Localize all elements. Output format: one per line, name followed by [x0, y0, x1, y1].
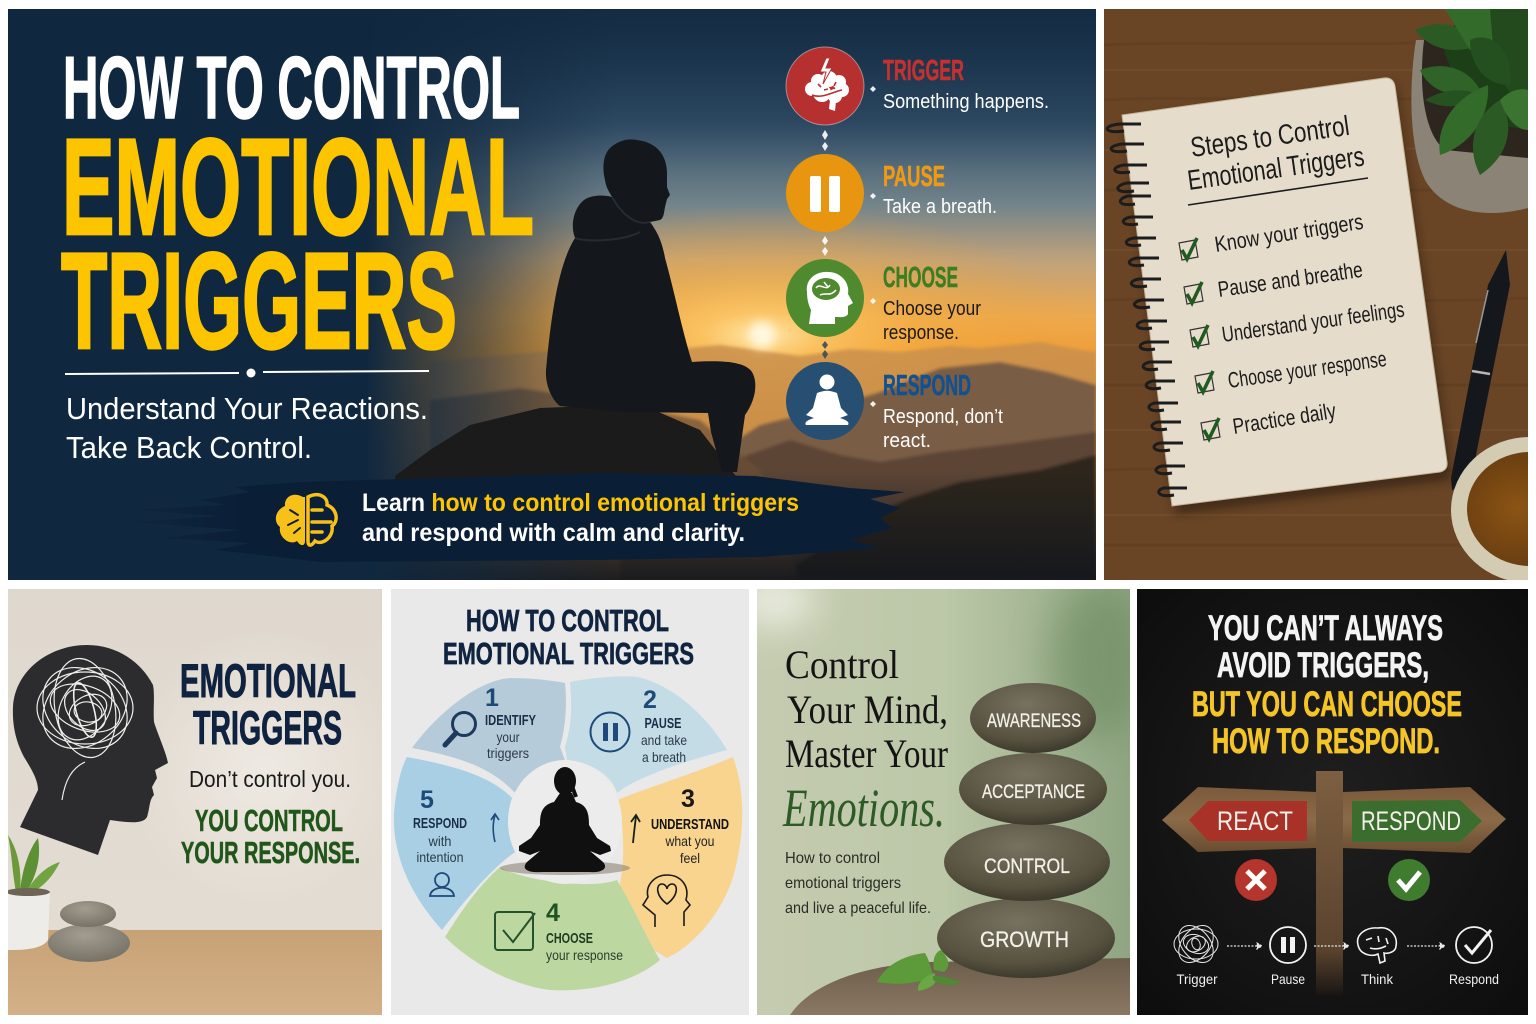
- center circle: [508, 760, 622, 884]
- rock under the figure: [395, 406, 736, 480]
- segment 5: respond: [394, 757, 515, 930]
- text: serif heading: [785, 642, 948, 776]
- text: diagram title: EMOTIONAL TRIGGERS: [443, 636, 694, 671]
- segment 1: identify: [412, 678, 566, 793]
- text: heading: EMOTIONAL: [180, 654, 356, 707]
- stone: acceptance: ACCEPTANCE: [982, 782, 1085, 803]
- wall: [8, 589, 382, 930]
- icon: trigger scribble: [1172, 919, 1220, 969]
- text: serif heading: Your Mind,: [787, 687, 948, 732]
- meditating silhouette: [500, 767, 630, 875]
- panel: react vs respond signpost: [1137, 589, 1528, 1015]
- segment 4: choose: your response: [546, 947, 623, 963]
- arrow: [1227, 943, 1262, 949]
- segment 3: understand: 3: [681, 785, 695, 813]
- checklist: [1179, 209, 1406, 440]
- notebook page: [1122, 78, 1447, 506]
- checklist: Understand your feelings: [1220, 297, 1406, 347]
- segment 1: identify: triggers: [487, 745, 529, 761]
- segment 4: choose: [445, 867, 660, 990]
- post: [1316, 771, 1343, 995]
- sign: react: [1162, 787, 1316, 852]
- process labels: Trigger: [1176, 971, 1218, 987]
- process labels: Pause: [1271, 971, 1305, 987]
- text: main title: EMOTIONAL: [62, 111, 534, 264]
- spiral binding: [1107, 124, 1187, 496]
- text: headline: AVOID TRIGGERS,: [1217, 646, 1429, 685]
- segment 2: pause: a breath: [642, 749, 686, 765]
- text: script word: Emotions.: [782, 778, 945, 838]
- panel: emotional triggers head: [6, 589, 405, 1015]
- handwritten title: [1188, 114, 1364, 190]
- pebbles: [48, 901, 130, 962]
- text: heading: TRIGGERS: [193, 701, 342, 754]
- icon: green check: [1388, 859, 1430, 901]
- process labels: Think: [1361, 971, 1394, 987]
- silhouette: seated man: [546, 139, 755, 472]
- segment 5: respond: with: [428, 833, 452, 849]
- text: don't control you: Don’t control you.: [189, 766, 351, 792]
- stone: acceptance: [959, 753, 1107, 825]
- checklist: Know your triggers: [1213, 209, 1365, 257]
- step: trigger: [786, 47, 1049, 125]
- plant leaves: [1415, 9, 1528, 175]
- plant pot: [1411, 9, 1528, 213]
- text: banner message: and respond with calm and clarity.: [362, 519, 745, 547]
- head silhouette: [13, 645, 168, 855]
- checklist: Choose your response: [1226, 346, 1388, 393]
- step: choose: [786, 259, 981, 344]
- checkboxes: [1179, 238, 1220, 440]
- segment 3: understand: what you: [665, 833, 714, 849]
- step: choose: CHOOSE: [883, 262, 958, 294]
- panel: hero banner: [8, 9, 1096, 580]
- stone: control: CONTROL: [984, 855, 1070, 878]
- step: trigger: Something happens.: [883, 91, 1049, 113]
- sun glow: [556, 216, 994, 358]
- arrow: [1407, 943, 1445, 949]
- segment 5: respond: 5: [420, 786, 434, 814]
- text: banner message: [362, 489, 799, 547]
- mountains: [430, 342, 1096, 580]
- text: tagline: How to control: [785, 850, 880, 867]
- text: subtitle: Take Back Control.: [66, 430, 312, 465]
- segment 2: pause: 2: [643, 686, 657, 714]
- process row: [1172, 919, 1499, 987]
- flow: four steps: [786, 47, 1049, 452]
- divider: [65, 368, 429, 378]
- text: serif heading: Master Your: [785, 731, 948, 776]
- icon: yellow brain: [276, 495, 336, 545]
- icon: red cross: [1235, 859, 1277, 901]
- segment 2: pause: [565, 676, 727, 793]
- sign: respond: [1343, 787, 1506, 853]
- text: tagline: emotional triggers: [785, 875, 901, 892]
- step: pause: [786, 154, 997, 232]
- segment 2: pause: and take: [641, 732, 687, 748]
- text: main title: [61, 56, 532, 351]
- scribble thoughts: [36, 658, 134, 800]
- blurred green background: [757, 589, 1130, 1015]
- arrow: [1314, 943, 1349, 949]
- segment 3: understand: UNDERSTAND: [651, 816, 729, 833]
- text: banner message: Learn how to control emotional triggers: [362, 489, 799, 517]
- text: tagline: and live a peaceful life.: [785, 900, 931, 917]
- icon: brain: [1358, 928, 1396, 963]
- text: main title: HOW TO CONTROL: [63, 38, 520, 137]
- step: pause: Take a breath.: [883, 196, 997, 218]
- icon: pause: [1270, 927, 1306, 963]
- text: diagram title: HOW TO CONTROL: [466, 603, 669, 638]
- banner: brush stroke: [223, 473, 904, 562]
- step: trigger: TRIGGER: [883, 55, 964, 87]
- checklist: Practice daily: [1231, 398, 1338, 439]
- stone: control: [944, 823, 1110, 901]
- segment 1: identify: your: [496, 729, 520, 745]
- stone: growth: [937, 898, 1115, 978]
- diagram background: [391, 589, 749, 1015]
- text: green message: [181, 803, 360, 870]
- table: [8, 930, 382, 1015]
- pen: [1451, 250, 1510, 490]
- text: diagram title: [443, 603, 694, 671]
- icon: respond check: [1456, 927, 1492, 963]
- handwritten title: Emotional Triggers: [1186, 140, 1366, 196]
- step: respond: react.: [883, 430, 931, 452]
- sign: respond: RESPOND: [1361, 806, 1461, 836]
- process labels: [1176, 971, 1499, 987]
- coffee cup: [1451, 437, 1528, 580]
- segment 1: identify: IDENTIFY: [485, 712, 536, 729]
- signpost: [1162, 771, 1506, 995]
- handwritten title: Steps to Control: [1189, 110, 1351, 163]
- panel: circular steps diagram: [391, 589, 749, 1015]
- rock base: [790, 958, 1130, 1015]
- green leaves: [877, 950, 963, 991]
- segment 1: identify: 1: [485, 684, 499, 712]
- plant in white pot: [6, 835, 60, 950]
- text: serif heading: Control: [785, 642, 899, 687]
- step: respond: RESPOND: [883, 370, 971, 402]
- sign: react: REACT: [1217, 806, 1293, 836]
- segment 3: understand: feel: [680, 850, 700, 866]
- segment 4: choose: CHOOSE: [546, 930, 593, 947]
- segment 3: understand: [618, 757, 742, 958]
- text: main title: TRIGGERS: [61, 225, 457, 378]
- stone stack: [937, 683, 1115, 978]
- step: respond: [786, 362, 1003, 452]
- stone: awareness: [970, 683, 1096, 753]
- process labels: Respond: [1449, 971, 1499, 987]
- sun disc: [749, 322, 775, 348]
- text: green message: YOU CONTROL: [195, 803, 343, 838]
- connector dots: [822, 86, 876, 407]
- checklist: Pause and breathe: [1216, 257, 1364, 302]
- stone: awareness: AWARENESS: [987, 711, 1081, 732]
- dark background: [1137, 589, 1528, 1015]
- step: choose: Choose your: [883, 298, 981, 320]
- text: subtitle: [66, 397, 426, 458]
- panel: notebook on wooden desk: [1104, 9, 1536, 583]
- wooden desk: [1104, 9, 1528, 580]
- notebook shadow: [1126, 84, 1452, 514]
- segment 5: respond: RESPOND: [413, 815, 467, 832]
- text: tagline: [785, 850, 931, 917]
- segment 4: choose: 4: [546, 899, 560, 927]
- left navy overlay: [8, 30, 596, 580]
- step: pause: PAUSE: [883, 161, 945, 193]
- text: subtitle: Understand Your Reactions.: [66, 391, 428, 426]
- bottom darkening: [392, 482, 1096, 580]
- segment 2: pause: PAUSE: [644, 715, 682, 732]
- step: choose: response.: [883, 322, 959, 344]
- text: headline: [1192, 609, 1462, 761]
- segment 5: respond: intention: [416, 849, 464, 865]
- panel: zen stones: [735, 575, 1150, 1015]
- hero background: sunset sky: [378, 9, 1096, 580]
- text: heading: [182, 664, 356, 745]
- text: green message: YOUR RESPONSE.: [181, 835, 360, 870]
- stone: growth: GROWTH: [980, 927, 1069, 952]
- step: respond: Respond, don’t: [883, 406, 1003, 428]
